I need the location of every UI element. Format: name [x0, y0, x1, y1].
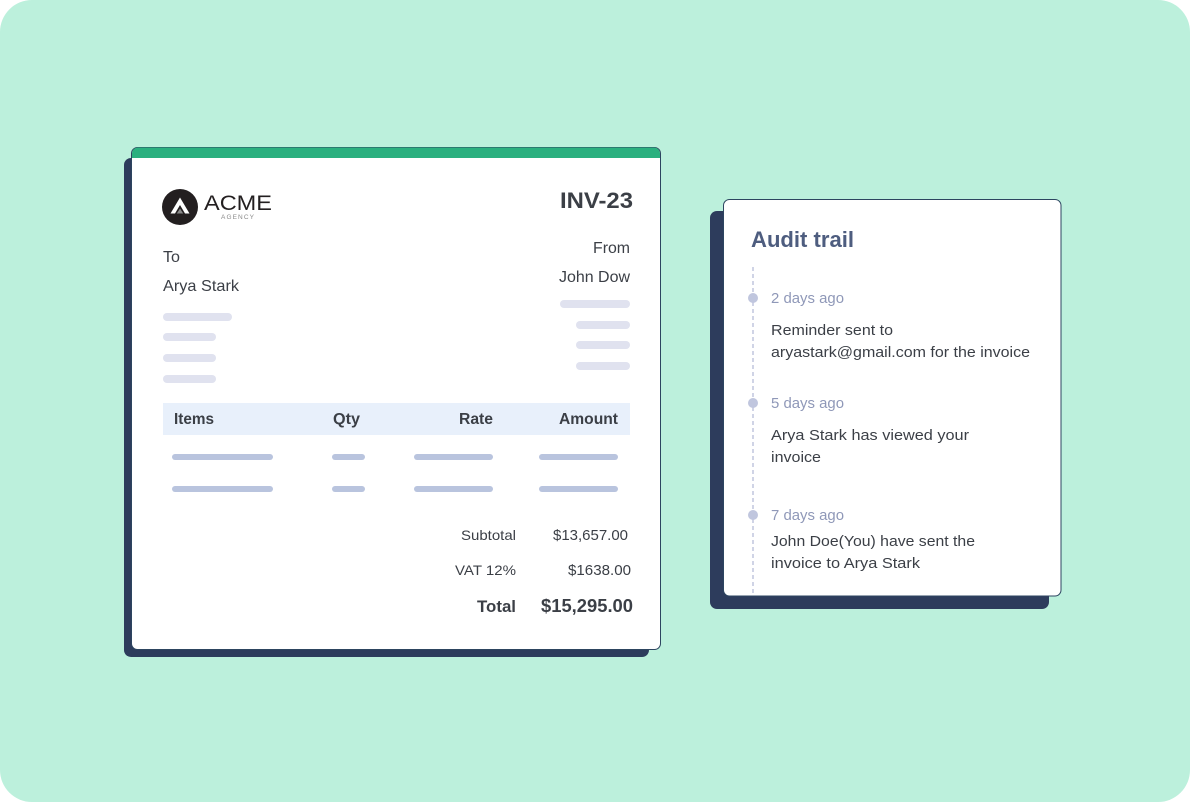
sender block: John Dow: [559, 269, 630, 286]
audit entry: viewed: 5 days ago: [771, 395, 844, 412]
audit entry: viewed: [771, 395, 969, 466]
audit entry: reminder: [771, 290, 1030, 361]
items table: Qty: [333, 411, 360, 428]
invoice totals: $15,295.00: [541, 596, 633, 616]
logo: ACME agency: ACME: [204, 192, 272, 215]
audit entry: sent: 7 days ago: [771, 507, 844, 524]
recipient block: To: [163, 249, 180, 266]
audit heading: Audit trail: [751, 227, 854, 252]
sender block: [559, 240, 630, 370]
audit entry: viewed: Arya Stark has viewed your: [771, 427, 969, 444]
invoice card shadow: [124, 158, 649, 657]
invoice totals: Total: [477, 597, 516, 616]
audit entry: sent: John Doe(You) have sent the: [771, 533, 975, 550]
panel: audit trail: [710, 200, 1061, 609]
logo: ACME agency: [162, 189, 272, 225]
invoice totals: VAT 12%: [455, 562, 516, 578]
invoice number: INV-23: [560, 188, 633, 213]
items table: Amount: [559, 411, 619, 428]
invoice green header strip: [132, 148, 660, 158]
timeline: [748, 267, 758, 595]
audit card shadow: [710, 211, 1049, 609]
audit entry: reminder: aryastark@gmail.com for the invoice: [771, 344, 1030, 361]
invoice totals: $13,657.00: [553, 527, 628, 544]
audit card: [724, 200, 1061, 596]
audit entry: viewed: invoice: [771, 449, 821, 466]
sender block: From: [593, 240, 630, 257]
audit entry: reminder: 2 days ago: [771, 290, 844, 307]
items table: [163, 403, 630, 492]
logo: ACME agency: AGENCY: [221, 214, 255, 221]
recipient block: Arya Stark: [163, 278, 240, 295]
panel: invoice: [124, 148, 660, 657]
invoice totals: $1638.00: [568, 562, 631, 579]
items table: Items: [174, 411, 214, 428]
audit entry: sent: [771, 507, 975, 572]
invoice totals: Subtotal: [461, 527, 516, 543]
audit entry: sent: invoice to Arya Stark: [771, 555, 921, 572]
invoice card: [132, 148, 660, 650]
audit entry: reminder: Reminder sent to: [771, 322, 893, 339]
items table: Rate: [459, 411, 493, 428]
invoice totals: [455, 527, 633, 616]
recipient block: [163, 249, 240, 383]
